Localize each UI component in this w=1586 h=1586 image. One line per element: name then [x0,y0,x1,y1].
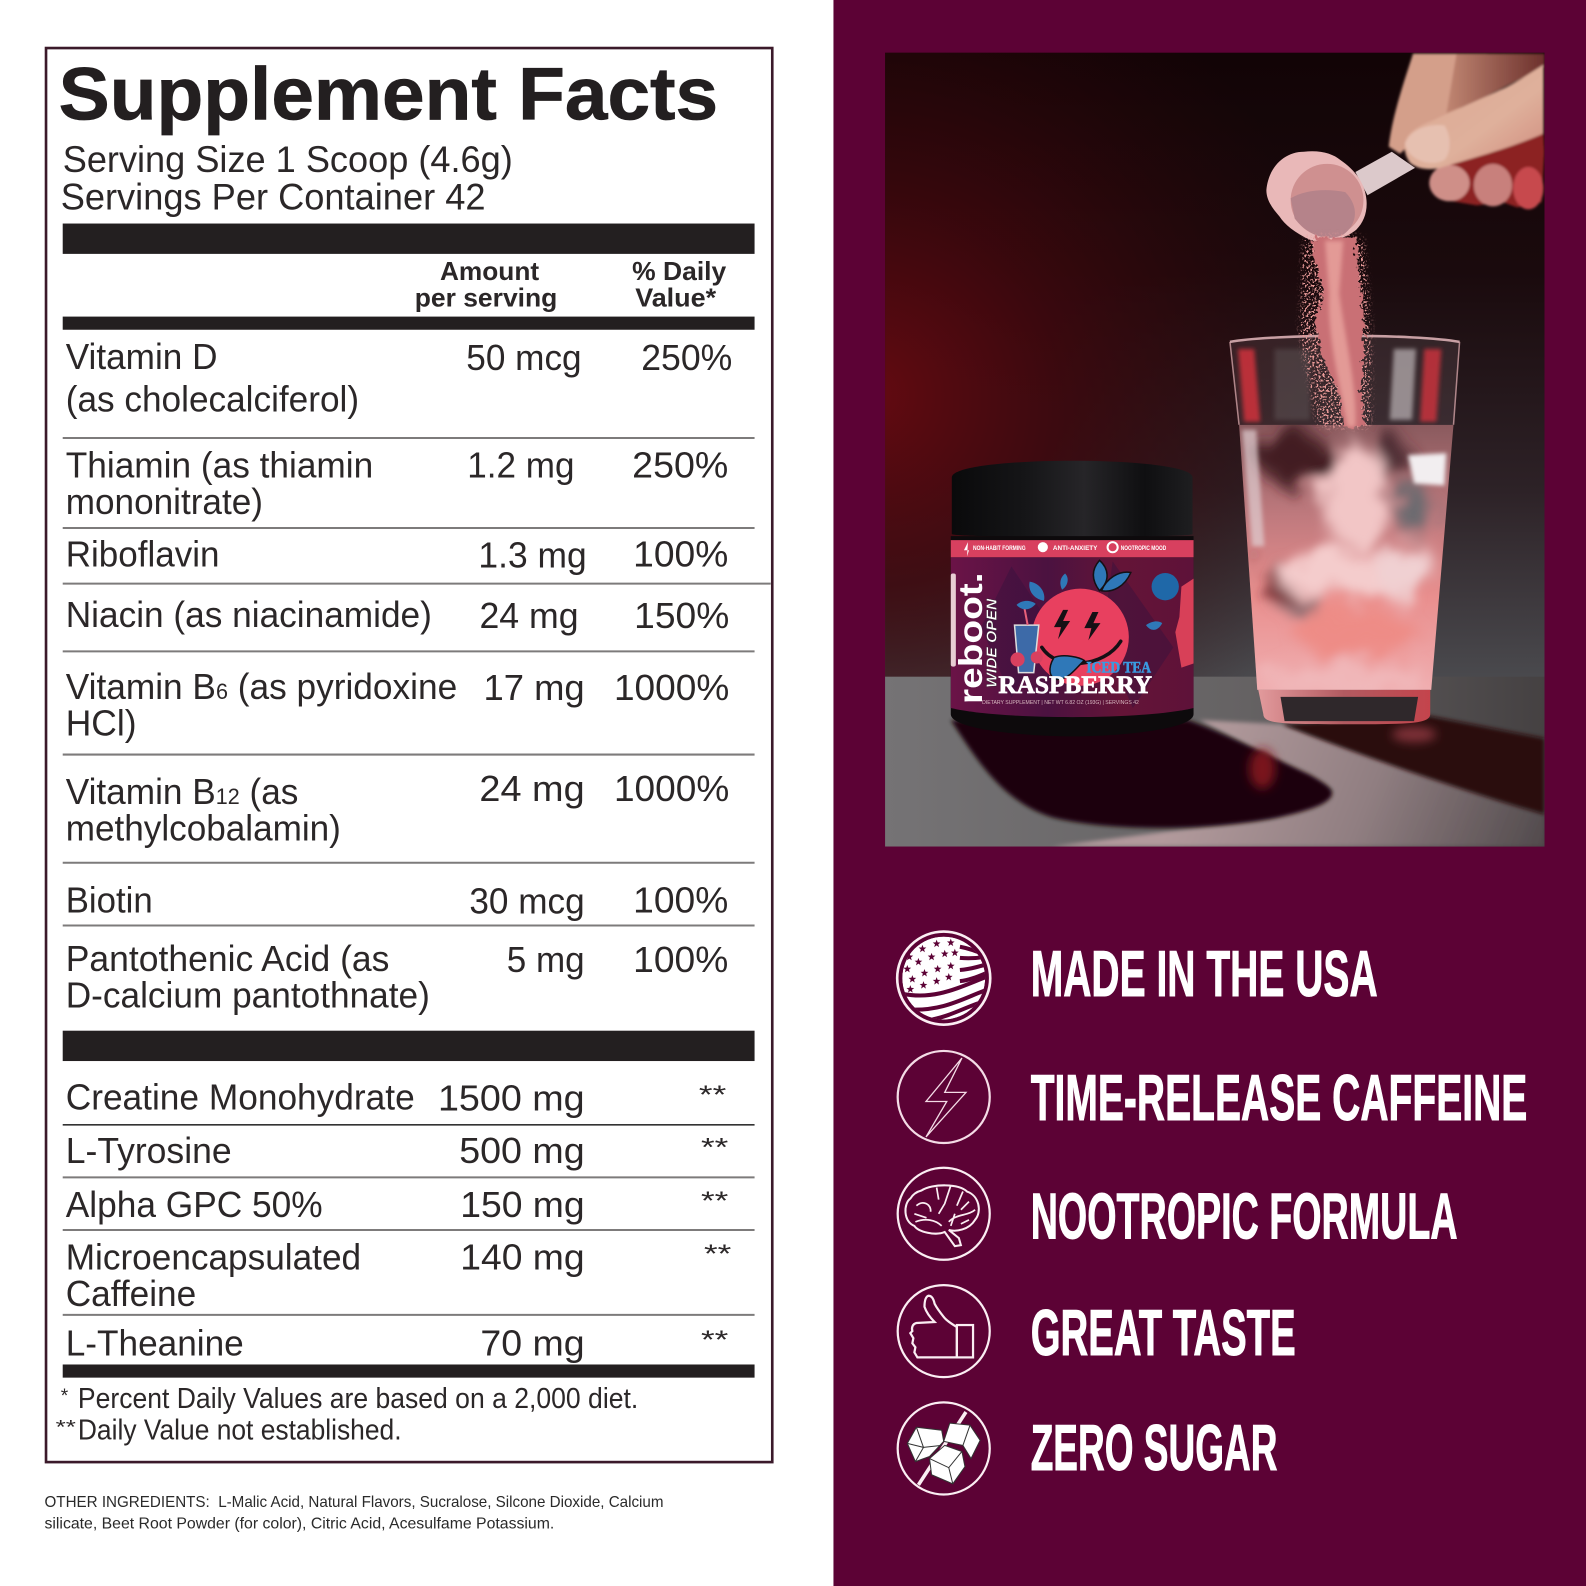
scoop handle [1355,152,1415,195]
footnotes: Percent Daily Values are based on a 2,000 diet. [78,1383,638,1415]
drinking glass [1230,336,1460,724]
row: vitamin B12: 24 mg [479,768,585,809]
row: vitamin D: Vitamin D [66,336,217,377]
powder in scoop [1291,190,1355,238]
row: riboflavin: 1.3 mg [478,534,587,575]
row: pantothenic acid: D-calcium pantothnate) [66,974,430,1015]
row: thiamin: 250% [632,444,728,485]
scoop [1266,151,1415,241]
row: thiamin: Thiamin (as thiamin [66,444,373,485]
blue badge [1152,573,1179,600]
row: pantothenic acid: Pantothenic Acid (as [66,938,389,979]
row: creatine monohydrate: 1500 mg [438,1078,585,1119]
row: niacin: Niacin (as niacinamide) [66,594,432,635]
row: vitamin B6 [66,666,729,743]
heading: GREAT TASTE [1031,1296,1296,1369]
row: niacin [66,594,729,636]
row: thiamin [66,444,728,522]
glass shadow [1283,716,1545,814]
row: thiamin: 1.2 mg [467,444,575,485]
serving information [61,138,513,217]
glass rim [1230,336,1460,342]
thick bar middle [63,1031,755,1061]
row: pantothenic acid: 5 mg [507,939,585,980]
row: vitamin D [66,336,732,420]
feature: time-release caffeine [898,1051,1527,1143]
row: alpha GPC: ** [701,1186,728,1216]
panel: maroon background [833,0,1586,1586]
row: thiamin: mononitrate) [66,481,263,522]
row: vitamin B12: methylcobalamin) [66,808,341,849]
thumbnail [1405,125,1450,163]
thick bar top [63,224,755,254]
row: biotin: 100% [633,879,728,920]
powder cloud in water [1242,430,1446,693]
falling powder stream [1303,238,1368,427]
feature: great taste [898,1285,1296,1377]
serving information: Servings Per Container 42 [61,175,486,217]
row: L-theanine: ** [701,1324,728,1354]
column headers: per serving [415,282,557,312]
row: vitamin B6: 1000% [614,667,729,708]
row: microencapsulated caffeine: ** [704,1238,731,1268]
feature: made in the usa [897,932,1378,1025]
pink band [951,540,1194,557]
powder core [1325,241,1356,427]
row: microencapsulated caffeine: Caffeine [66,1273,196,1314]
wall backdrop [885,53,1545,680]
row: alpha GPC [66,1184,728,1225]
footnotes: * [61,1386,69,1407]
feature: nootropic formula [898,1168,1458,1260]
band text: NON-HABIT FORMING [973,546,1026,552]
base dark center [1281,697,1418,721]
row: L-tyrosine: L-Tyrosine [66,1130,232,1171]
thumb [1405,65,1544,169]
column headers: Value* [635,282,717,312]
serving information: Serving Size 1 Scoop (4.6g) [63,138,513,180]
row: vitamin B6: 17 mg [483,667,585,708]
scattered leaves [1017,574,1162,630]
icon: thumbs up [898,1285,990,1377]
jar body [951,536,1194,736]
row: biotin [66,879,728,921]
column headers: Amount [440,256,539,286]
row: vitamin B12 [66,768,729,849]
row: vitamin D: 250% [641,337,732,378]
panel: supplement facts label [46,48,772,1462]
row: vitamin B6: Vitamin B6 (as pyridoxine [66,666,457,707]
index finger [1387,52,1461,156]
other ingredients [45,1494,664,1532]
feature: zero sugar [898,1402,1277,1494]
row: L-tyrosine [66,1130,728,1171]
jar lid [952,461,1193,537]
side tag [951,574,956,667]
row: L-theanine: L-Theanine [66,1322,244,1363]
lower fingers [1429,134,1545,209]
row: riboflavin [66,533,728,575]
label frame [46,48,772,1462]
icon: lightning bolt [898,1051,990,1143]
icon: sugar cubes crossed out [898,1402,990,1494]
footnotes: Daily Value not established. [78,1414,402,1446]
row: vitamin B6: HCl) [66,702,137,743]
glass upper walls [1230,336,1460,425]
heading: ZERO SUGAR [1031,1411,1277,1484]
row: pantothenic acid: 100% [633,939,728,980]
left background [0,0,833,1586]
glass base [1258,690,1430,724]
back of hand [1446,54,1545,113]
row: microencapsulated caffeine [66,1236,731,1314]
label panel [951,557,1194,717]
row: alpha GPC: 150 mg [460,1184,585,1225]
row: microencapsulated caffeine: 140 mg [460,1236,585,1277]
mascot [1010,560,1131,686]
row: vitamin D: (as cholecalciferol) [66,379,359,420]
red table glow [1249,726,1436,789]
footnotes [56,1383,638,1446]
row: riboflavin: Riboflavin [66,533,219,574]
row: vitamin B12: 1000% [614,768,729,809]
label pattern [981,561,1173,708]
row: vitamin B12: Vitamin B12 (as [66,771,298,812]
column headers [415,256,727,312]
row: microencapsulated caffeine: Microencapsulated [66,1236,361,1277]
row: riboflavin: 100% [633,533,728,574]
water [1239,425,1453,690]
row: L-tyrosine: 500 mg [459,1130,585,1171]
band text [964,542,1167,556]
small print: DIETARY SUPPLEMENT | NET WT 6.82 OZ (193G) | SERVINGS 42 [982,700,1139,706]
row: creatine monohydrate: Creatine Monohydrate [66,1077,415,1118]
title: Supplement Facts [59,52,718,135]
row: vitamin D: 50 mcg [466,337,582,378]
row: biotin: 30 mcg [469,880,585,921]
icon: american flag [897,932,991,1025]
row: L-tyrosine: ** [701,1132,728,1162]
row: alpha GPC: Alpha GPC 50% [66,1184,323,1225]
wide open sublabel: WIDE OPEN [983,598,1000,688]
side info blob [1175,579,1194,668]
header rule [63,317,755,330]
glass side walls [1230,342,1460,425]
product jar [951,461,1194,736]
row: creatine monohydrate: ** [699,1080,726,1110]
raspberry text: RASPBERRY [998,671,1152,699]
column headers: % Daily [632,256,727,286]
brand wordmark: reboot. [953,572,990,704]
other ingredients: OTHER INGREDIENTS: L-Malic Acid, Natural Flavors, Sucralose, Silcone Dioxide, Calcium [45,1494,664,1511]
iced tea text: ICED TEA [1086,660,1151,677]
powder body [1313,238,1365,427]
band text: NOOTROPIC MOOD [1121,546,1167,552]
table surface [885,677,1545,847]
footnotes: ** [56,1417,77,1438]
row: L-theanine: 70 mg [480,1322,585,1363]
row: L-theanine [66,1322,728,1363]
row: biotin: Biotin [66,879,153,920]
product photo [885,53,1545,847]
band text: ANTI-ANXIETY [1053,546,1097,552]
row: pantothenic acid [66,938,728,1015]
jar shadow [951,720,1332,828]
hand [1389,54,1545,209]
other ingredients: silicate, Beet Root Powder (for color), Citric Acid, Acesulfame Potassium. [45,1515,554,1532]
scoop bowl [1266,151,1367,241]
red reflections [1238,349,1441,422]
powder scatter [1303,239,1368,425]
row: niacin: 150% [634,595,729,636]
scoop opening [1291,164,1363,237]
row: creatine monohydrate [66,1077,726,1119]
icon: brain [898,1168,990,1260]
thick bar bottom [63,1364,755,1378]
row: niacin: 24 mg [479,595,579,636]
